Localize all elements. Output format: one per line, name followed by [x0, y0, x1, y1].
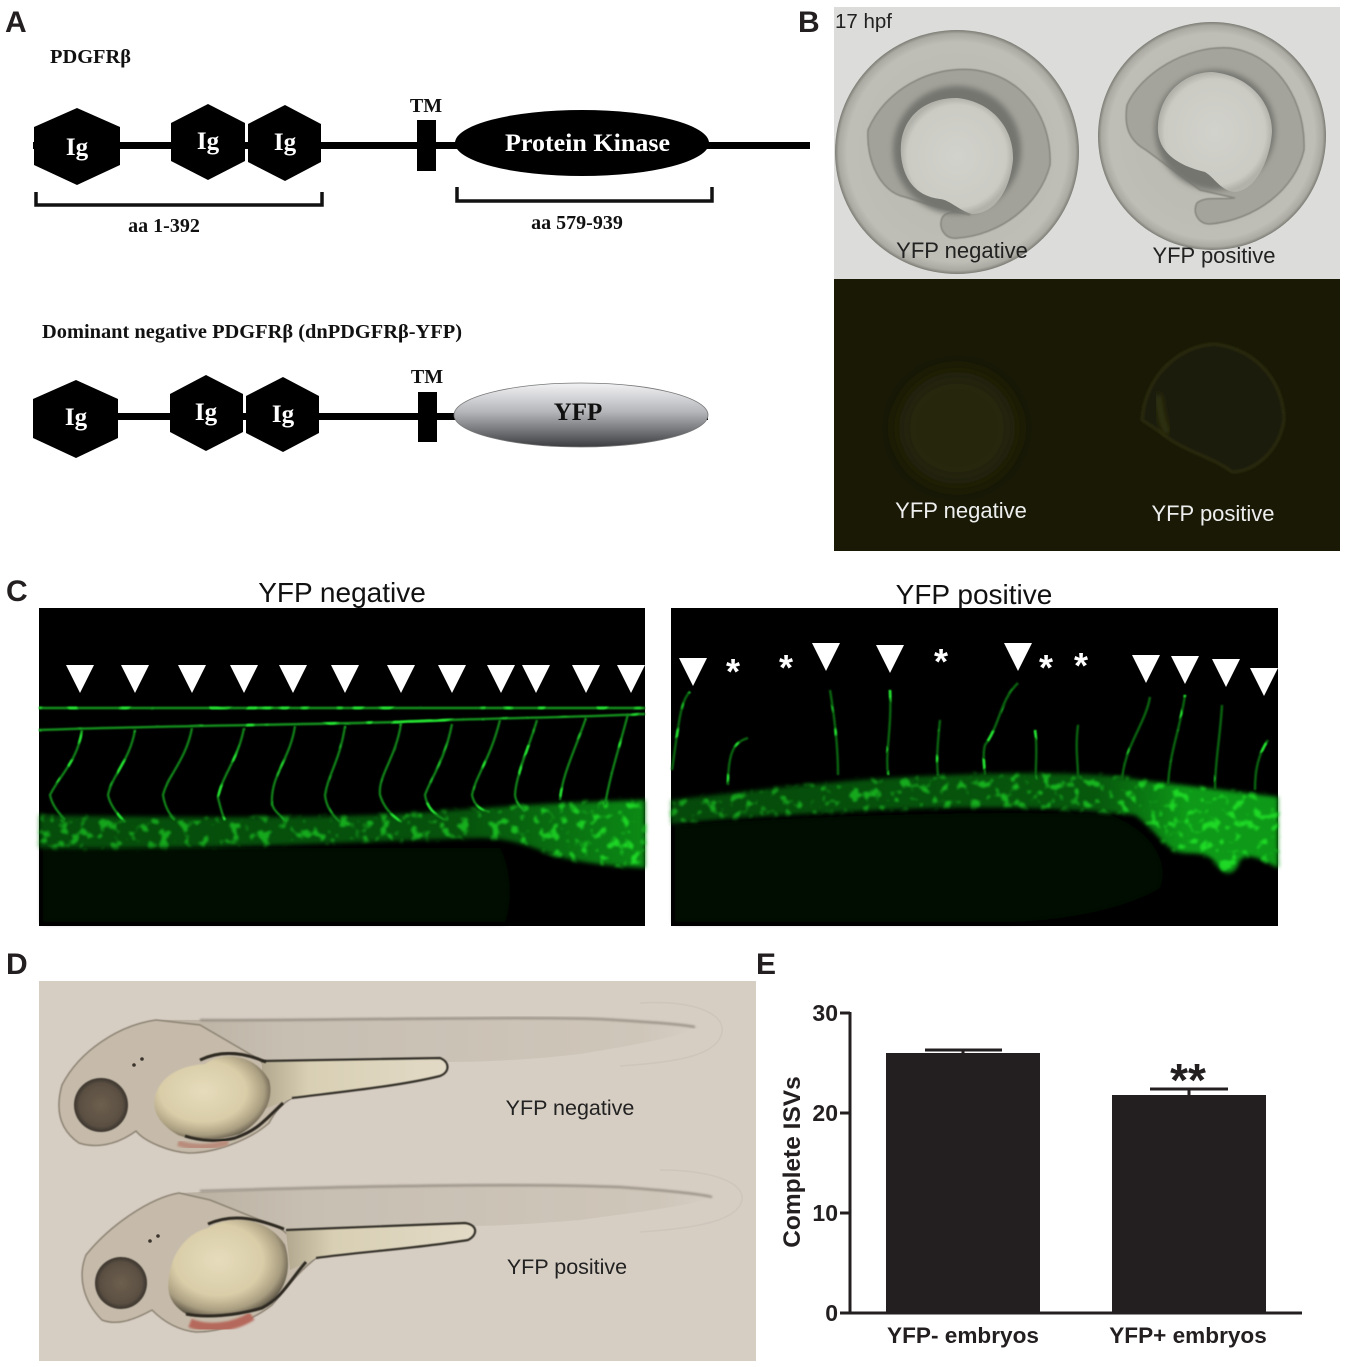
label 17 hpf: 17 hpf [835, 10, 892, 33]
title YFP negative: YFP negative [258, 577, 426, 608]
YFP negative label: YFP negative [506, 1096, 634, 1120]
wild-type receptor backbone [33, 142, 810, 149]
yolk ball [168, 1220, 288, 1316]
y axis [840, 1012, 1302, 1313]
y axis tick labels: 20 [812, 1100, 838, 1126]
otic vesicle [132, 1057, 144, 1067]
bracket aa 579-939 [457, 187, 712, 234]
asterisks positive: * [1074, 645, 1088, 686]
asterisks positive [726, 641, 1088, 692]
arrowheads positive [679, 643, 1278, 696]
YFP domain: YFP [554, 399, 602, 426]
bracket aa 579-939: aa 579-939 [531, 212, 623, 234]
y axis tick labels: 10 [812, 1200, 838, 1226]
panel letter D: D [6, 948, 28, 981]
panel letter E: E [756, 948, 776, 981]
Ig domain 3 [248, 105, 321, 181]
panel letter B: B [798, 6, 820, 39]
right embryo [1098, 22, 1326, 250]
tail fin [620, 1003, 722, 1066]
heading: dominant negative: Dominant negative PDGFRβ (dnPDGFRβ-YFP) [42, 321, 462, 343]
asterisks positive: * [1039, 647, 1053, 688]
arrowheads negative [66, 665, 645, 693]
eye [74, 1078, 128, 1132]
panel B: embryo photographs at 17 hpf: YFP positive [1152, 243, 1276, 268]
trunk and tail [150, 1018, 695, 1090]
heading: PDGFRβ: PDGFRβ [50, 46, 131, 68]
Ig domain 2 [171, 104, 245, 180]
Ig domain 1 dn [33, 380, 118, 458]
left embryo [835, 30, 1079, 274]
yolk extension [286, 1223, 475, 1270]
TM domain dn [411, 366, 443, 442]
YFP negative larva [59, 1003, 722, 1153]
panel E: bar chart of complete ISVs: YFP+ embryos [1109, 1323, 1267, 1348]
Ig domain 1: Ig [66, 134, 89, 161]
red blood pool [190, 1316, 252, 1327]
tail fin [640, 1170, 742, 1232]
dominant negative backbone [33, 413, 708, 420]
YFP positive label: YFP positive [507, 1255, 627, 1279]
panel C: confocal vessel images [6, 575, 1278, 926]
brightfield image [834, 7, 1340, 279]
TM domain dn: TM [411, 366, 443, 388]
yolk extension [262, 1058, 448, 1110]
positive embryo glow [1142, 344, 1284, 472]
negative embryo glow [899, 372, 1015, 484]
YFP positive larva [82, 1170, 742, 1332]
y axis title: Complete ISVs [779, 1076, 806, 1248]
bar YFP- [886, 1050, 1040, 1313]
head and body outline [82, 1193, 316, 1332]
Ig domain 2 dn: Ig [195, 399, 218, 426]
bar YFP+ [1112, 1089, 1266, 1313]
confocal image positive [671, 608, 1278, 926]
Ig domain 1 [34, 108, 120, 185]
panel A: protein domain diagrams [5, 6, 810, 458]
Ig domain 3 dn [246, 377, 319, 452]
Ig domain 2: Ig [197, 128, 220, 155]
Ig domain 3 dn: Ig [272, 401, 295, 428]
labels brightfield: YFP negative [896, 238, 1028, 263]
panel D: larval zebrafish photographs [6, 948, 756, 1361]
y axis tick labels [812, 1000, 838, 1326]
Ig domain 2 dn [170, 375, 243, 451]
TM domain [410, 95, 442, 171]
Ig domain 1 dn: Ig [65, 404, 88, 431]
labels fluorescence: YFP negative [895, 498, 1027, 523]
panel B: embryo photographs at 17 hpf: YFP positive [1151, 501, 1275, 526]
panel B: embryo photographs at 17 hpf [798, 6, 1340, 551]
bracket aa 1-392 [36, 192, 322, 237]
panel E: bar chart of complete ISVs [756, 948, 1302, 1348]
red blood pool [178, 1142, 228, 1147]
Protein Kinase domain [455, 110, 709, 176]
head and body outline [59, 1020, 292, 1153]
otic vesicle [148, 1234, 160, 1243]
asterisks positive: * [934, 641, 948, 682]
Ig domain 3: Ig [274, 129, 297, 156]
eye [95, 1257, 147, 1309]
asterisks positive: * [726, 651, 740, 692]
asterisks positive: * [779, 647, 793, 688]
TM domain: TM [410, 95, 442, 117]
panel letter C: C [6, 575, 28, 608]
confocal image negative [39, 608, 645, 926]
y axis tick labels: 0 [825, 1300, 838, 1326]
fluorescence image [834, 279, 1340, 551]
significance stars: ** [1170, 1054, 1206, 1106]
YFP domain [454, 383, 708, 447]
panel letter A: A [5, 6, 27, 39]
bracket aa 1-392: aa 1-392 [128, 215, 200, 237]
photo background [39, 981, 756, 1361]
y axis tick labels: 30 [812, 1000, 838, 1026]
trunk and tail [170, 1185, 712, 1260]
title YFP positive: YFP positive [896, 579, 1052, 610]
category labels: YFP- embryos [887, 1323, 1039, 1348]
yolk ball [154, 1056, 270, 1139]
Protein Kinase domain: Protein Kinase [505, 130, 670, 157]
